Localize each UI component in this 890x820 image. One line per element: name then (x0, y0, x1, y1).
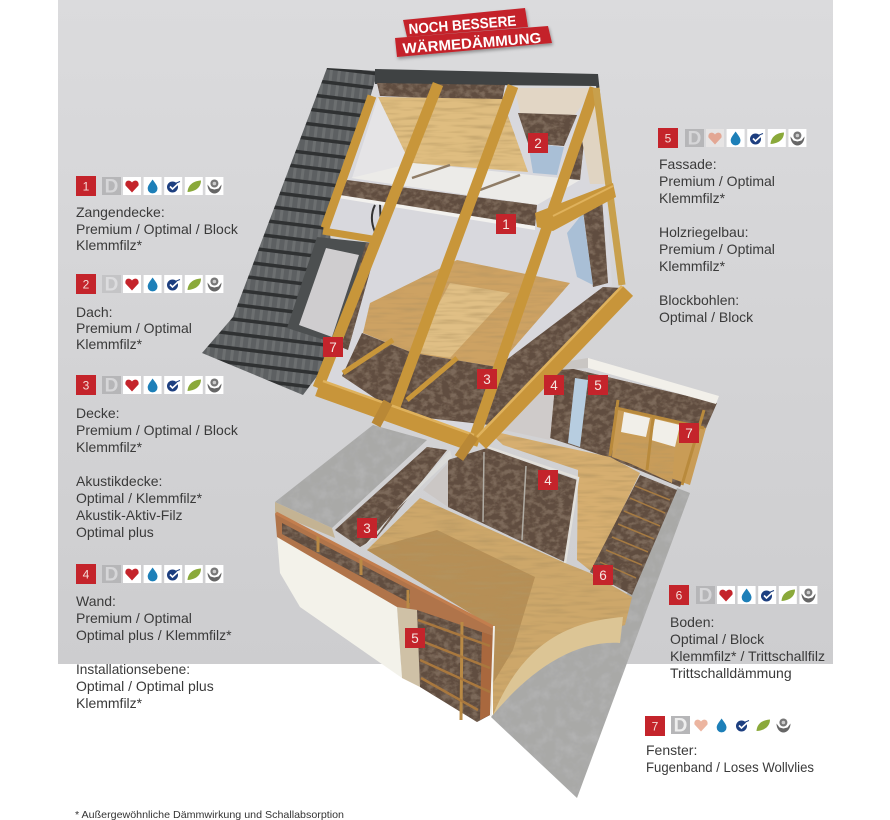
legend 3: Decke: Akustikdecke: (76, 473, 162, 489)
legend 1: Zangendecke: 1 (83, 180, 90, 194)
cream upper gable wall (515, 88, 593, 115)
diagram marker 5 facade: 5 (411, 631, 419, 646)
legend 2: Dach (76, 274, 223, 352)
tan render layer (397, 605, 420, 687)
white ceiling strip (338, 195, 535, 230)
diagram marker 4 wall: 4 (544, 473, 552, 488)
roof window frame (287, 237, 373, 345)
legend 6: Boden: Optimal / Block (670, 631, 765, 647)
ceiling insulation (335, 447, 447, 547)
hallway wood floor (487, 430, 640, 572)
illustration: lower floor cutaway (275, 358, 719, 798)
legend 2: Dach: Klemmfilz* (76, 336, 143, 352)
front wall with bricks and insulation (275, 513, 494, 722)
insulation beside window (336, 243, 378, 350)
diagram marker 7 roof: 7 (329, 340, 337, 355)
banner: noch bessere waermedaemmung (395, 8, 552, 57)
legend 4: Wand (76, 564, 232, 711)
banner: noch bessere waermedaemmung: WÄRMEDÄMMUNG (402, 30, 542, 57)
stair-side floor insulation with joists (590, 475, 677, 595)
diagram marker 1 (496, 214, 516, 234)
legend 5: Fassade: Blockbohlen: (659, 292, 739, 308)
diagram marker 7 door (679, 423, 699, 443)
cable duct (372, 204, 381, 232)
diagram marker 3 ceiling: 3 (363, 521, 371, 536)
main wood floor (367, 498, 632, 715)
diagram marker 3 ceiling (357, 518, 377, 538)
diagram marker 7 door: 7 (685, 426, 693, 441)
diagram marker 6 floor (593, 565, 613, 585)
diagram marker 1: 1 (502, 217, 510, 232)
top insulation band (377, 83, 505, 101)
legend 3: Decke: Klemmfilz* (76, 439, 143, 455)
darker floor patch (367, 530, 535, 683)
diagram marker 5 hallway: 5 (594, 378, 602, 393)
right gable edge insulation (566, 140, 584, 180)
legend 6: Boden: D (699, 586, 712, 606)
diagram marker 5 hallway (588, 375, 608, 395)
legend 6: Boden (669, 585, 825, 681)
hallway inner wall (490, 363, 557, 440)
legend 7: Fenster: Fugenband / Loses Wollvlies (646, 759, 814, 775)
wood ceiling panel (378, 97, 528, 172)
legend 4: Wand: D (105, 564, 118, 586)
room wall insulation (448, 447, 578, 563)
white slope panel (345, 97, 430, 200)
legend 5: Fassade: D (688, 128, 701, 150)
legend 2: Dach: Premium / Optimal (76, 320, 192, 336)
diagram marker 4 hallway (544, 375, 564, 395)
concrete base slab (491, 488, 690, 798)
legend 2: Dach: D (105, 274, 118, 296)
legend 5: Fassade: Optimal / Block (659, 309, 754, 325)
collar tie beam (535, 183, 616, 231)
diagram marker 7 roof (323, 337, 343, 357)
upper gable blue membrane (528, 143, 564, 175)
legend 5: Fassade: Premium / Optimal (659, 241, 775, 257)
front white wall (277, 535, 402, 678)
banner: noch bessere waermedaemmung: NOCH BESSERE (408, 14, 517, 38)
diagram marker 6 floor: 6 (599, 568, 607, 583)
back wall insulation (550, 365, 717, 487)
legend 5: Fassade: Premium / Optimal (659, 173, 775, 189)
diagram marker 3 eave: 3 (483, 372, 491, 387)
ridge cap (375, 69, 602, 112)
legend 3: Decke: Optimal / Klemmfilz* (76, 490, 203, 506)
diagram marker 4 wall (538, 470, 558, 490)
eave beams and rafters (318, 84, 628, 458)
legend 5: Fassade: Holzriegelbau: (659, 224, 748, 240)
roof window glass (299, 248, 359, 337)
legend 4: Wand: Optimal / Optimal plus (76, 678, 214, 694)
legend 3: Decke: Akustik-Aktiv-Filz (76, 507, 183, 523)
grey background panel (58, 0, 833, 664)
legend 4: Wand: Premium / Optimal (76, 610, 192, 626)
plywood underlay curve (493, 617, 623, 715)
slab front edge (275, 502, 335, 538)
diagram marker 5 facade (405, 628, 425, 648)
concrete ceiling slab top (275, 425, 427, 528)
legend 5: Fassade: Klemmfilz* (659, 190, 726, 206)
illustration: attic roof cutaway (202, 68, 628, 458)
diagram marker 3 eave (477, 369, 497, 389)
legend 7: Fenster: 7 (652, 720, 659, 734)
legend 3: Decke: Premium / Optimal / Block (76, 422, 239, 438)
interior back walls (318, 90, 612, 440)
legend 4: Wand: Installationsebene: (76, 661, 190, 677)
room inner grey wall (423, 463, 448, 507)
legend 4: Wand: Wand: (76, 593, 116, 609)
legend 7: Fenster (645, 716, 814, 775)
attic wood floor (363, 260, 570, 367)
legend 3: Decke: Optimal plus (76, 524, 154, 540)
back wall top rim (588, 358, 719, 404)
lower gable insulation (583, 198, 608, 287)
roof tiles (202, 68, 378, 395)
legend 1: Zangendecke: Zangendecke: (76, 204, 165, 220)
legend 4: Wand: 4 (83, 568, 90, 582)
lower gable blue membrane (567, 213, 593, 285)
ceiling insulation band (340, 180, 537, 226)
legend 5: Fassade (658, 128, 806, 325)
legend 7: Fenster: D (674, 716, 687, 736)
legend 3: Decke: D (105, 376, 118, 396)
legend 6: Boden: 6 (676, 588, 683, 602)
blue window (568, 378, 588, 447)
legend 6: Boden: Klemmfilz* / Trittschallfilz (670, 648, 825, 664)
cream gable end (582, 100, 611, 184)
legend 7: Fenster: Fenster: (646, 742, 697, 758)
legend 4: Wand: Optimal plus / Klemmfilz* (76, 627, 232, 643)
diagram marker 2 (528, 133, 548, 153)
white ceiling slab (351, 163, 580, 205)
diagram marker 4 hallway: 4 (550, 378, 558, 393)
legend 1: Zangendecke: D (105, 176, 118, 198)
upper gable insulation (518, 113, 577, 146)
legend 2: Dach: Dach: (76, 304, 113, 320)
legend 5: Fassade: Fassade: (659, 156, 717, 172)
legend 5: Fassade: 5 (665, 132, 672, 146)
legend 1: Zangendecke: Premium / Optimal / Block (76, 221, 239, 237)
legend 1: Zangendecke (76, 176, 239, 253)
legend 4: Wand: Klemmfilz* (76, 695, 143, 711)
perforated metal strip (363, 450, 452, 547)
legend 1: Zangendecke: Klemmfilz* (76, 237, 143, 253)
diagram marker 2: 2 (534, 136, 542, 151)
legend 5: Fassade: Klemmfilz* (659, 258, 726, 274)
legend 3: Decke: Decke: (76, 405, 120, 421)
legend 3: Decke: 3 (83, 378, 90, 392)
attic floor insulation band (342, 287, 622, 425)
legend 2: Dach: 2 (83, 278, 90, 292)
legend 6: Boden: Trittschalldämmung (670, 665, 792, 681)
legend 6: Boden: Boden: (670, 614, 714, 630)
balcony door with frame (610, 400, 706, 485)
legend 3: Decke (76, 375, 239, 540)
